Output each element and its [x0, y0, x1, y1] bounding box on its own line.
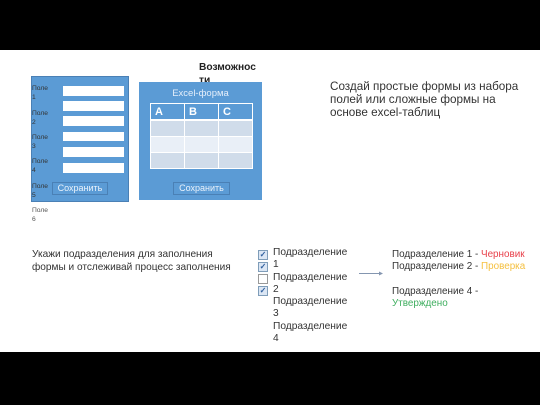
- department list: 2: [273, 284, 279, 295]
- field label 1: 1: [32, 94, 36, 100]
- description: departments: Укажи подразделения для заполнения: [32, 249, 213, 260]
- field label 6: 6: [32, 216, 36, 222]
- excel table: [150, 103, 253, 169]
- field label 5: [32, 183, 48, 198]
- department status list: [392, 249, 526, 309]
- department list: Подразделение: [273, 321, 347, 332]
- save button: excel form: [173, 182, 230, 195]
- form input fields: [63, 86, 124, 173]
- checkbox 2: [258, 262, 268, 272]
- description: forms: основе excel-таблиц: [330, 106, 440, 119]
- department status list: Подразделение 2 - Проверка: [392, 261, 525, 272]
- field label 3: [32, 134, 48, 150]
- field label 1: Поле: [32, 85, 48, 92]
- department list: Подразделение: [273, 296, 347, 307]
- field label 5: Поле: [32, 183, 48, 190]
- department list: 3: [273, 308, 279, 319]
- description: departments: формы и отслеживай процесс заполнения: [32, 262, 231, 273]
- panel: simple form: [31, 76, 129, 202]
- description: forms: полей или сложные формы на: [330, 93, 496, 106]
- description: forms: Создай простые формы из набора: [330, 80, 518, 93]
- field label 3: Поле: [32, 134, 48, 141]
- department status list: Утверждено: [392, 298, 448, 309]
- field label 4: Поле: [32, 158, 48, 165]
- save button: simple form: [52, 182, 108, 195]
- checkbox 3: [258, 274, 268, 284]
- field label 5: 5: [32, 192, 36, 198]
- field label 6: Поле: [32, 207, 48, 214]
- field label 2: [32, 110, 48, 126]
- excel form heading: Excel-форма: [172, 88, 229, 99]
- title: [199, 62, 256, 86]
- checkbox 1: ✓: [260, 250, 266, 259]
- description: departments: [32, 249, 231, 273]
- top black band: [0, 0, 540, 50]
- field label 4: 4: [32, 166, 36, 174]
- bottom black band: [0, 352, 540, 405]
- checkbox 2: ✓: [260, 262, 266, 271]
- department status list: Подразделение 1 - Черновик: [392, 249, 525, 260]
- checkbox 4: ✓: [260, 286, 266, 295]
- excel table: B: [189, 106, 197, 118]
- description: forms: [330, 80, 518, 119]
- department list: [273, 247, 347, 344]
- arrow: [359, 272, 383, 276]
- field label 2: Поле: [32, 110, 48, 117]
- field label 4: [32, 158, 48, 174]
- department list: 1: [273, 259, 279, 270]
- save button: simple form: Сохранить: [58, 183, 102, 193]
- save button: excel form: Сохранить: [179, 183, 224, 193]
- field label 6: [32, 207, 48, 222]
- excel table: A: [155, 106, 163, 118]
- checkbox 1: [258, 250, 268, 260]
- field label 1: [32, 85, 48, 100]
- department status list: Подразделение 4 -: [392, 286, 478, 297]
- field label 2: 2: [32, 118, 36, 126]
- department list: Подразделение: [273, 272, 347, 283]
- title: ти: [199, 75, 210, 86]
- title: Возможнос: [199, 62, 256, 73]
- department list: 4: [273, 333, 279, 344]
- checkbox 4: [258, 286, 268, 296]
- department list: Подразделение: [273, 247, 347, 258]
- excel table: C: [223, 106, 231, 118]
- panel: excel form: [139, 82, 262, 200]
- field label 3: 3: [32, 142, 36, 150]
